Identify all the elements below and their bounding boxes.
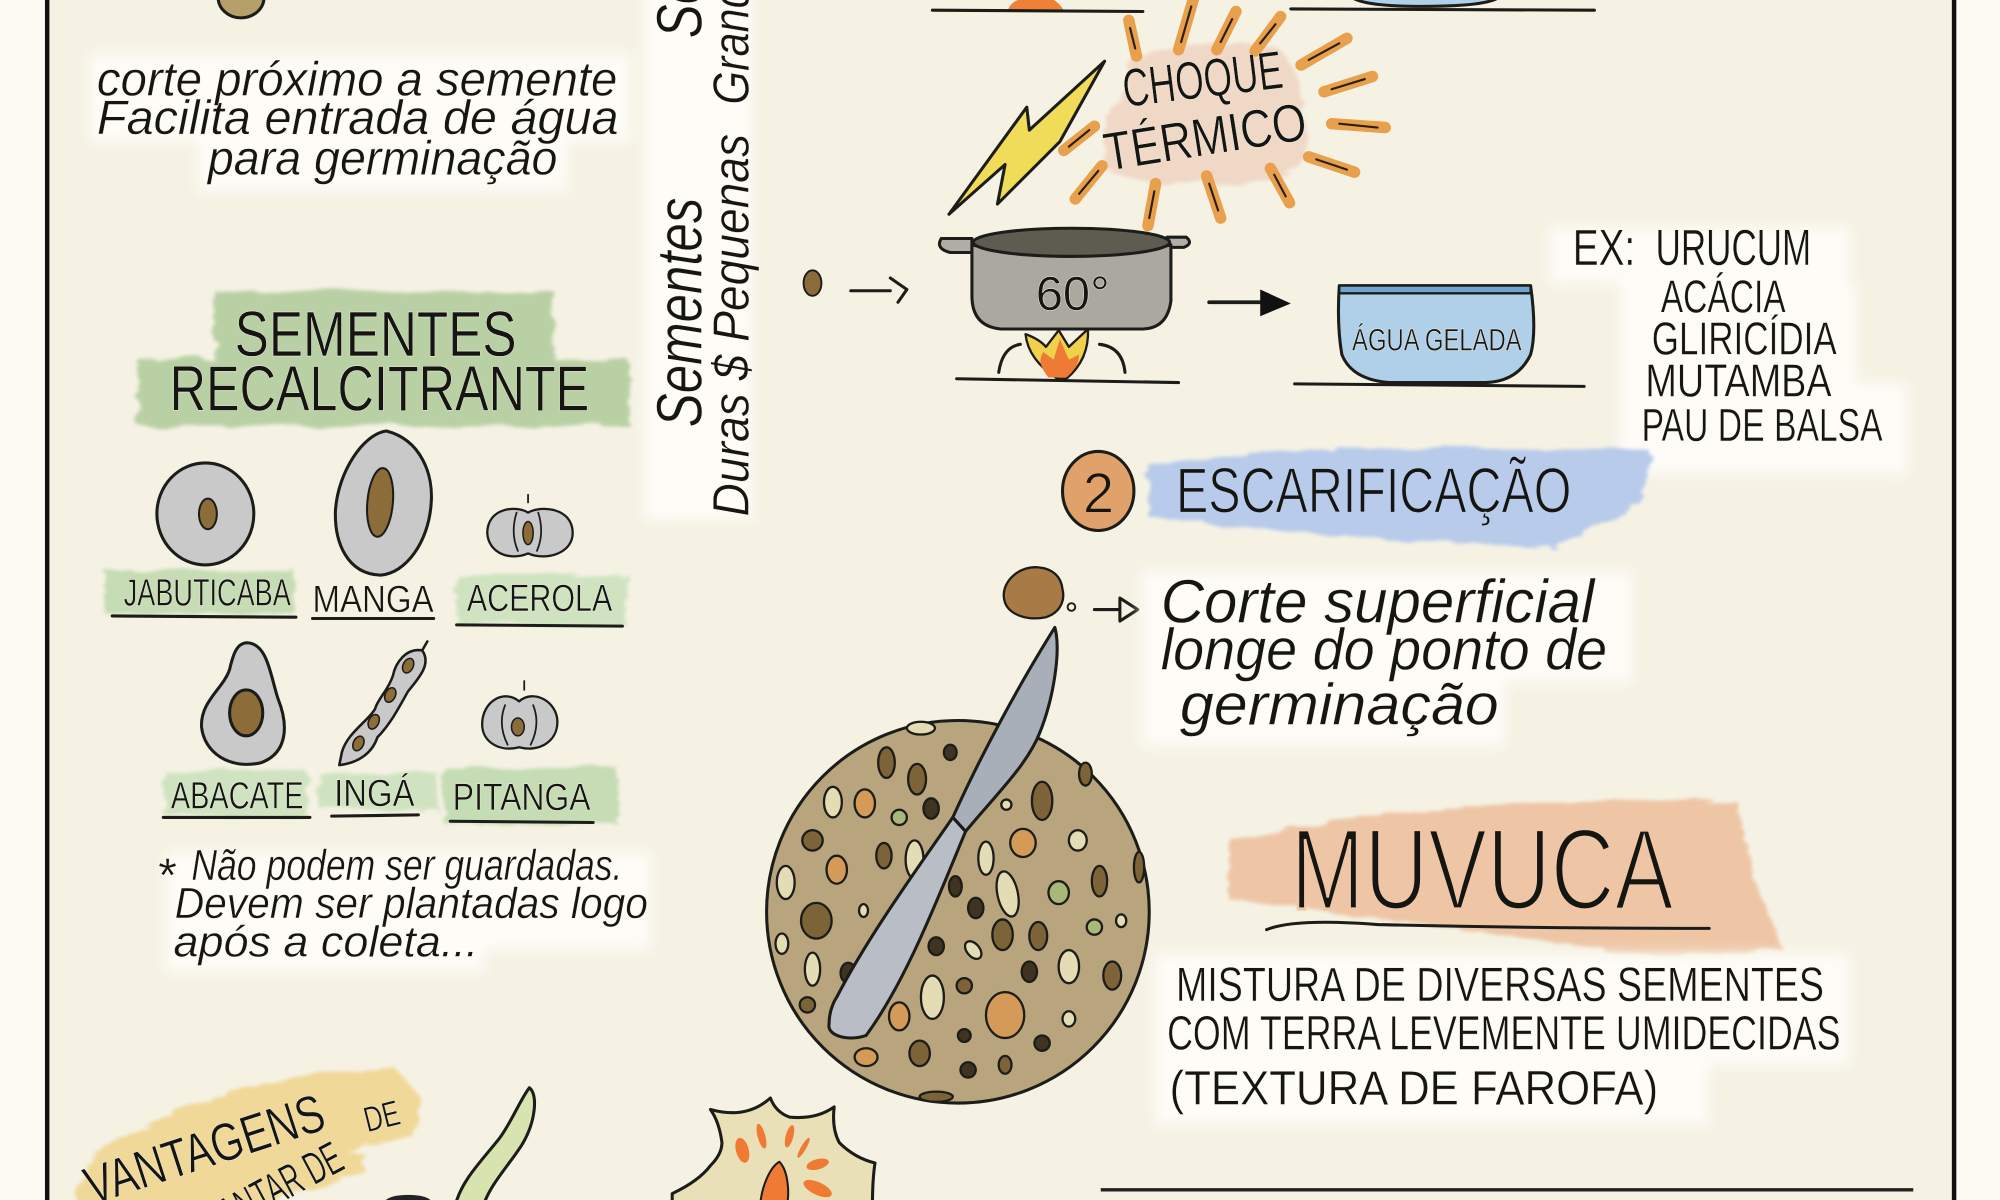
divider line: [1101, 1188, 1913, 1191]
text: description: MISTURA DE DIVERSAS SEMENTES: [1176, 958, 1824, 1012]
label: jabuticaba: JABUTICABA: [124, 572, 291, 615]
text highlight: [1154, 954, 1849, 1125]
text: corte superficial: [1161, 567, 1607, 737]
seeds: [776, 722, 1144, 1102]
arrow: seed to pot: [851, 278, 907, 302]
panel: sementes recalcitrante: [105, 291, 651, 972]
icon: flame: [760, 1162, 788, 1200]
text: description: [1167, 958, 1841, 1115]
text: corte description: Facilita entrada de água: [97, 91, 619, 145]
icon: seed: [804, 270, 821, 296]
icon: jabuticaba: [157, 463, 254, 565]
burst blob: [1103, 44, 1307, 184]
arrow: seed to text: [1094, 598, 1138, 621]
icon: manga: [335, 431, 431, 575]
text: corte superficial: germinação: [1180, 672, 1499, 737]
text: corte description: para germinação: [206, 132, 557, 186]
icon: flame: [999, 329, 1125, 379]
text: choque termico: [1100, 41, 1311, 183]
icon: sprout: [455, 1088, 535, 1200]
panel: choque termico: [949, 0, 1385, 226]
label: inga: INGÁ: [334, 772, 415, 815]
text: examples: GLIRICÍDIA: [1652, 313, 1837, 365]
sparks: [733, 1123, 834, 1200]
heading brush: [1148, 448, 1652, 548]
text: corte superficial: Corte superficial: [1161, 567, 1596, 635]
line: bowl base: [1295, 384, 1584, 386]
icon: bowl fragment: [1352, 0, 1499, 6]
label: acerola: ACEROLA: [467, 577, 613, 620]
heading: SEMENTES: [235, 298, 517, 370]
heading underline: [1267, 922, 1709, 930]
heading: MUVUCA: [1291, 806, 1674, 934]
label: abacate: ABACATE: [171, 775, 304, 818]
line: stove base: [932, 10, 1143, 11]
icon: knife: [829, 627, 1057, 1038]
panel: escarificacao: [1004, 448, 1652, 746]
line: bowl base: [1291, 9, 1594, 10]
text: seed types: Sementes: [644, 198, 716, 427]
heading brush: [138, 291, 630, 426]
label: jabuticaba: [105, 570, 296, 617]
icon: hot pot: 60°: [1036, 267, 1110, 321]
icon: seed fragment: [218, 0, 264, 18]
note: plantio: *: [158, 848, 177, 902]
icon: pitanga: [482, 681, 557, 749]
panel: muvuca description: [1154, 801, 1849, 1125]
text: examples: MUTAMBA: [1645, 355, 1832, 407]
rays: [1064, 0, 1385, 226]
badge: number 2: 2: [1083, 462, 1114, 525]
icon: inga: [339, 641, 427, 765]
text: choque termico: TÉRMICO: [1100, 93, 1311, 183]
panel: agua quente e gelada: [804, 219, 1907, 474]
label: acerola: [457, 574, 628, 626]
icon: acerola: [487, 495, 573, 556]
text: examples: PAU DE BALSA: [1642, 399, 1883, 451]
label: manga: MANGA: [312, 578, 434, 621]
note: plantio: Devem ser plantadas logo: [175, 880, 648, 928]
text: corte superficial: longe do ponto de: [1161, 618, 1607, 682]
icon: ice water bowl: [1338, 286, 1534, 383]
heading: [170, 298, 589, 425]
panel: corte proximo a semente: [89, 0, 631, 191]
icon: abacate: [201, 643, 284, 764]
icon: fire fragment: [1008, 0, 1064, 10]
panel: top pot fragments: [932, 0, 1594, 11]
text highlight: [644, 0, 753, 520]
icon: hot pot: [939, 228, 1190, 329]
panel: fire burst: [672, 1098, 875, 1200]
badge: number 2: [1062, 451, 1134, 530]
icon: soil fragment: [383, 1195, 434, 1200]
note: plantio: [158, 842, 648, 966]
heading: DE: [360, 1093, 404, 1140]
note highlight: [166, 852, 651, 972]
text highlight: [1142, 571, 1633, 746]
line: stove base: [957, 379, 1179, 383]
text: examples: ACÁCIA: [1661, 270, 1786, 322]
note: plantio: após a coleta...: [173, 918, 478, 966]
panel: muvuca illustration: [767, 627, 1149, 1103]
text: examples: [1573, 219, 1883, 451]
heading brush: [1227, 801, 1783, 956]
arrow: pot to bowl: [1209, 289, 1291, 316]
panel: vantagens: [77, 1069, 535, 1200]
text: seed types: [644, 0, 760, 516]
icon: seed with cut: [1004, 567, 1075, 618]
icon: soil disc: [767, 721, 1149, 1103]
text highlight: [89, 54, 631, 191]
label: pitanga: PITANGA: [453, 776, 591, 819]
text: examples: EX:: [1573, 219, 1635, 276]
text: choque termico: CHOQUE: [1119, 41, 1286, 119]
burst: [672, 1098, 875, 1200]
text: description: (TEXTURA DE FAROFA): [1170, 1061, 1658, 1115]
text: corte description: [97, 53, 619, 186]
icon: ice water bowl: ÁGUA GELADA: [1352, 322, 1522, 358]
panel: sementes duras vertical note: [644, 0, 760, 520]
icon: lightning: [949, 61, 1105, 214]
text: seed types: Duras $ Pequenas: [703, 134, 760, 516]
text: examples: URUCUM: [1656, 219, 1811, 276]
heading brush: [77, 1069, 422, 1200]
note: plantio: Não podem ser guardadas.: [191, 842, 622, 890]
heading: ESCARIFICAÇÃO: [1176, 455, 1571, 527]
examples highlight: [1550, 227, 1907, 474]
text: corte description: corte próximo a semente: [97, 53, 617, 107]
heading: RECALCITRANTE: [170, 353, 589, 425]
